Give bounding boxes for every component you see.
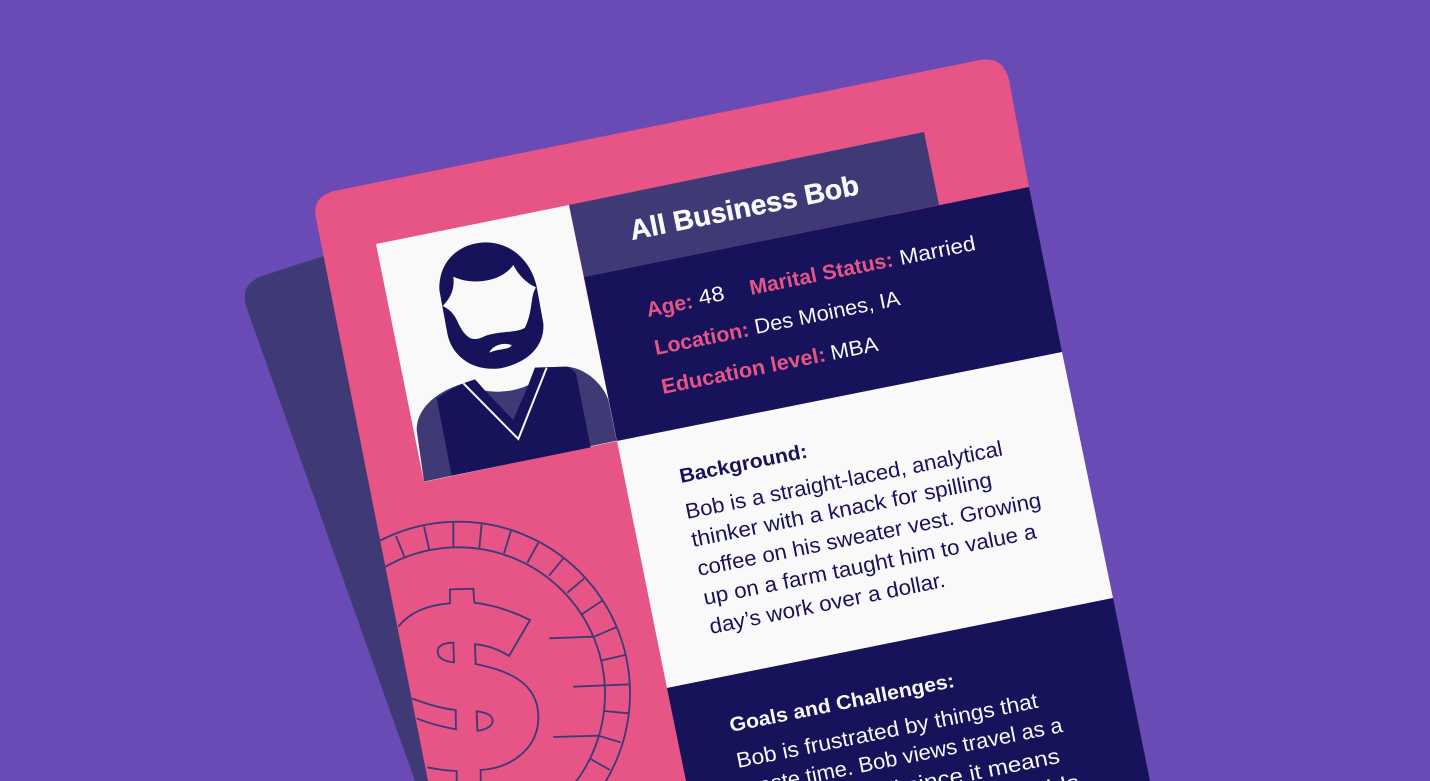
background text [683,437,1043,639]
background heading: Background: [678,441,809,488]
panel: stats [584,187,1062,441]
age value: 48 [696,282,726,310]
location label: Location: [652,318,751,360]
icon: dollar coin outline [380,520,631,781]
panel: background [617,352,1113,688]
background text: coffee on his sweater vest. Growing [695,488,1043,581]
photo background [376,205,617,482]
background text: up on a farm taught him to value a [701,519,1038,610]
portrait panel [376,205,617,482]
name heading: All Business Bob [627,169,862,246]
coin ridges [396,522,630,770]
mouth [489,344,512,353]
age label: Age: [644,290,695,322]
education label: Education level: [659,343,828,399]
head and beard [439,242,543,369]
panel: goals and challenges [667,598,1150,781]
coin rings [380,520,631,781]
goals heading: Goals and Challenges: [728,670,956,737]
location value: Des Moines, IA [752,287,902,339]
sweater body [437,367,591,476]
sweater v line [463,368,547,439]
education value: MBA [828,333,880,365]
background text: day’s work over a dollar. [707,568,947,639]
goals text: Bob is frustrated by things that [734,689,1040,773]
icon: bearded man [417,242,617,482]
back card shadow [245,254,600,781]
dollar sign [398,589,538,781]
front pink card [315,59,1029,781]
background text: Bob is a straight-laced, analytical [683,437,1005,524]
marital label: Marital Status: [747,248,895,300]
header band [569,132,939,277]
sweater sleeves [417,367,617,482]
face [443,265,536,339]
background text: thinker with a knack for spilling [689,468,994,552]
marital value: Married [897,232,977,270]
